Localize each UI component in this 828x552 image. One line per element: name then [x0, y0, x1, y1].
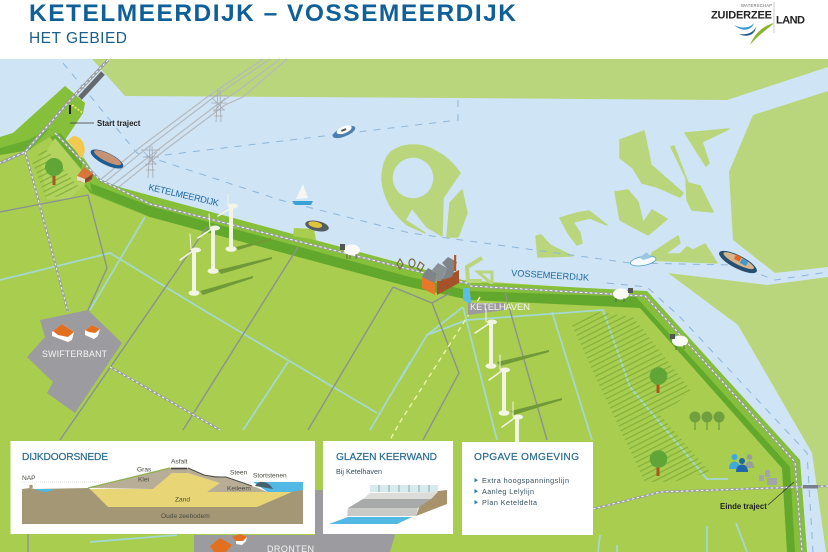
- polder grey roads: [0, 195, 547, 552]
- icon: cargo ship west: [88, 146, 126, 172]
- labels: dike layers: Oude zeebodem: [161, 513, 210, 520]
- bullet list: [474, 476, 569, 507]
- label: Swifterbant: SWIFTERBANT: [42, 349, 108, 359]
- icon: farmhouse: [77, 167, 93, 183]
- polder water lines: [0, 217, 747, 552]
- labels: dike layers: Steen: [230, 470, 248, 476]
- bullet list: Plan Keteldelta: [482, 498, 537, 507]
- north-west dike: [0, 86, 150, 217]
- land: northern shore: [92, 59, 828, 100]
- icon: white motorboat: [629, 251, 657, 268]
- panel: dijkdoorsnede: [10, 441, 315, 534]
- label: Ketelmeerdijk: KETELMEERDIJK: [148, 182, 221, 208]
- icon: tree one: [650, 367, 667, 393]
- east bridge: [803, 485, 818, 488]
- callout: einde traject: Einde traject: [720, 502, 767, 511]
- icon: west tree: [45, 158, 63, 185]
- land: eastern shore: [729, 91, 828, 273]
- sand beach: [67, 136, 85, 158]
- farm plot with stripes: [40, 138, 90, 200]
- subtitle: HET GEBIED: [29, 30, 127, 47]
- bullet list: Aanleg Lelylijn: [482, 487, 534, 496]
- icon: white boat north: [331, 122, 357, 141]
- icon: pylon south: [141, 146, 160, 178]
- town: Dronten: [194, 490, 395, 552]
- icon: wind turbines west: [180, 194, 272, 296]
- icon: house large: [52, 324, 74, 342]
- icon: tree two: [650, 450, 667, 476]
- labels: dike layers: Asfalt: [171, 458, 188, 466]
- logo: Zuiderzeeland: WATERSCHAP: [741, 3, 772, 8]
- labels: dike layers: Keileem: [227, 486, 251, 492]
- panel: glazen keerwand: [323, 441, 453, 534]
- power lines: [100, 59, 287, 190]
- labels: dike layers: [22, 458, 287, 520]
- icon: house small: [85, 325, 100, 339]
- chart: dike cross-section: [22, 468, 303, 524]
- bullet list: Extra hoogspanningslijn: [482, 476, 569, 485]
- harbour water: [463, 288, 472, 305]
- icon: sheep on east dike: [670, 334, 688, 350]
- callout: start traject: [70, 119, 141, 128]
- sea dike west: [80, 157, 470, 300]
- logo: Zuiderzeeland: [711, 2, 805, 45]
- vineyard stripes: [571, 312, 710, 482]
- logo: Zuiderzeeland: LAND: [776, 14, 805, 26]
- town: Swifterbant: [27, 310, 122, 413]
- labels: dike layers: NAP: [22, 475, 36, 482]
- yellow dashed line: Lelylijn: [390, 297, 480, 440]
- icon: dinghy: [304, 219, 330, 233]
- icon: people: [729, 454, 754, 472]
- Ketelhaven town: [468, 303, 505, 315]
- sea dike east: [467, 282, 807, 552]
- label: Ketelhaven: KETELHAVEN: [470, 302, 530, 313]
- land: south-east shore: [668, 273, 828, 552]
- icon: sheep on north-east dike: [613, 288, 633, 302]
- heading: glazen keerwand: GLAZEN KEERWAND: [336, 452, 437, 463]
- labels: dike layers: Stortstenen: [253, 472, 287, 480]
- icon: sheep west: [340, 244, 360, 259]
- labels: dike layers: Gras: [137, 466, 152, 474]
- icon: cargo ship east: [716, 247, 760, 277]
- subheading: location: Bij Ketelhaven: [336, 467, 382, 476]
- title: KETELMEERDIJK – VOSSEMEERDIJK: [29, 0, 516, 27]
- icon: artwork shapes on dike: [397, 259, 424, 271]
- panel: opgave omgeving: [462, 442, 593, 535]
- labels: dike layers: Klei: [138, 476, 150, 484]
- heading: dijkdoorsnede: DIJKDOORSNEDE: [22, 452, 108, 463]
- harbour piers: [467, 258, 492, 284]
- icon: wind turbines east: [475, 309, 562, 441]
- stripes: west field: [32, 148, 78, 198]
- depot at dike crest: [293, 228, 316, 240]
- icon: pylon north: [209, 90, 228, 122]
- logo: Zuiderzeeland: ZUIDERZEE: [711, 10, 772, 22]
- illustration: glass wall: [329, 485, 447, 524]
- label: Vossemeerdijk: VOSSEMEERDIJK: [511, 268, 590, 283]
- callout: start traject: Start traject: [97, 119, 141, 128]
- callout: einde traject: [720, 482, 794, 511]
- start marker with gate: [69, 105, 84, 114]
- icon: pumping station factory: [422, 255, 459, 295]
- heading: opgave omgeving: OPGAVE OMGEVING: [474, 452, 579, 463]
- icon: three small trees: [690, 412, 724, 430]
- bridge: [80, 73, 103, 98]
- islands: [382, 129, 729, 263]
- labels: dike layers: Zand: [175, 496, 190, 504]
- icon: sailboat: [292, 184, 313, 205]
- icon: grey buildings: [759, 470, 777, 485]
- icon: houses: [210, 534, 247, 552]
